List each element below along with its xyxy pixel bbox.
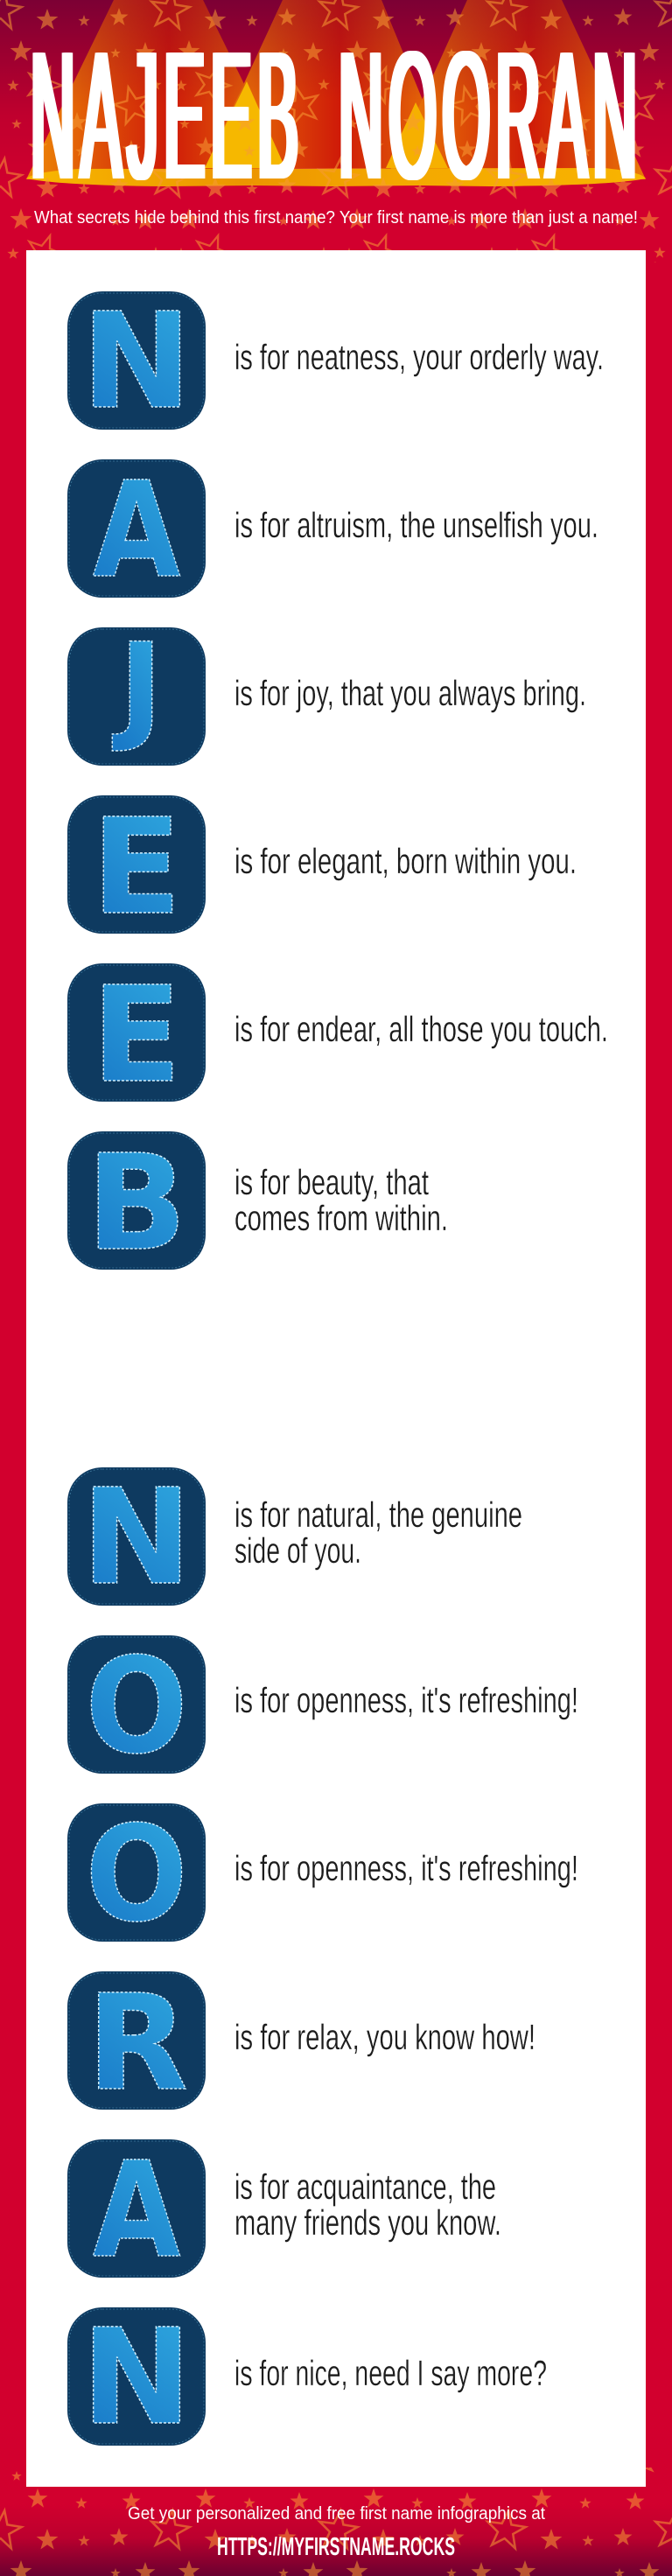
row A: acquaintance: is for acquaintance, the <box>234 2166 496 2207</box>
row N: neatness: N <box>81 284 192 438</box>
row J: joy: J <box>112 618 163 755</box>
row B: beauty: is for beauty, that <box>234 1162 429 1202</box>
row N: nice: is for nice, need I say more? <box>234 2353 547 2393</box>
row A: altruism: A <box>93 454 180 607</box>
row E: elegant: E <box>91 790 182 944</box>
footer url: HTTPS://MYFIRSTNAME.ROCKS <box>217 2533 455 2561</box>
row N: nice: N <box>81 2300 192 2454</box>
row A: acquaintance: A <box>93 2134 180 2287</box>
row A: altruism <box>67 454 598 607</box>
row R: relax <box>67 1966 536 2120</box>
row B: beauty <box>67 1126 448 1280</box>
spotlights <box>26 0 646 186</box>
row O: openness: O <box>86 1630 187 1784</box>
row A: acquaintance: many friends you know. <box>234 2202 501 2243</box>
row E: endear: E <box>91 958 182 1112</box>
star pattern: bottom <box>0 2468 672 2576</box>
row N: natural: is for natural, the genuine <box>234 1494 522 1535</box>
row O: openness again <box>67 1798 578 1952</box>
row E: endear <box>67 958 608 1112</box>
title: NAJEEB NOORAN <box>31 14 643 218</box>
row N: natural: N <box>81 1460 192 1614</box>
footer text: Get your personalized and free first name infographics at <box>128 2504 545 2524</box>
row B: beauty: B <box>86 1126 187 1280</box>
row O: openness again: O <box>86 1798 187 1952</box>
row N: natural: side of you. <box>234 1530 361 1571</box>
row N: natural <box>67 1460 522 1614</box>
subtitle: What secrets hide behind this first name? Your first name is more than just a name! <box>34 208 638 228</box>
row O: openness <box>67 1630 578 1784</box>
row E: elegant <box>67 790 577 944</box>
star pattern: top <box>0 0 672 262</box>
row R: relax: is for relax, you know how! <box>234 2017 536 2057</box>
row N: nice <box>67 2300 547 2454</box>
row J: joy <box>67 618 586 766</box>
row R: relax: R <box>87 1966 188 2120</box>
row N: neatness <box>67 284 604 438</box>
row A: acquaintance <box>67 2134 501 2287</box>
row B: beauty: comes from within. <box>234 1198 448 1238</box>
